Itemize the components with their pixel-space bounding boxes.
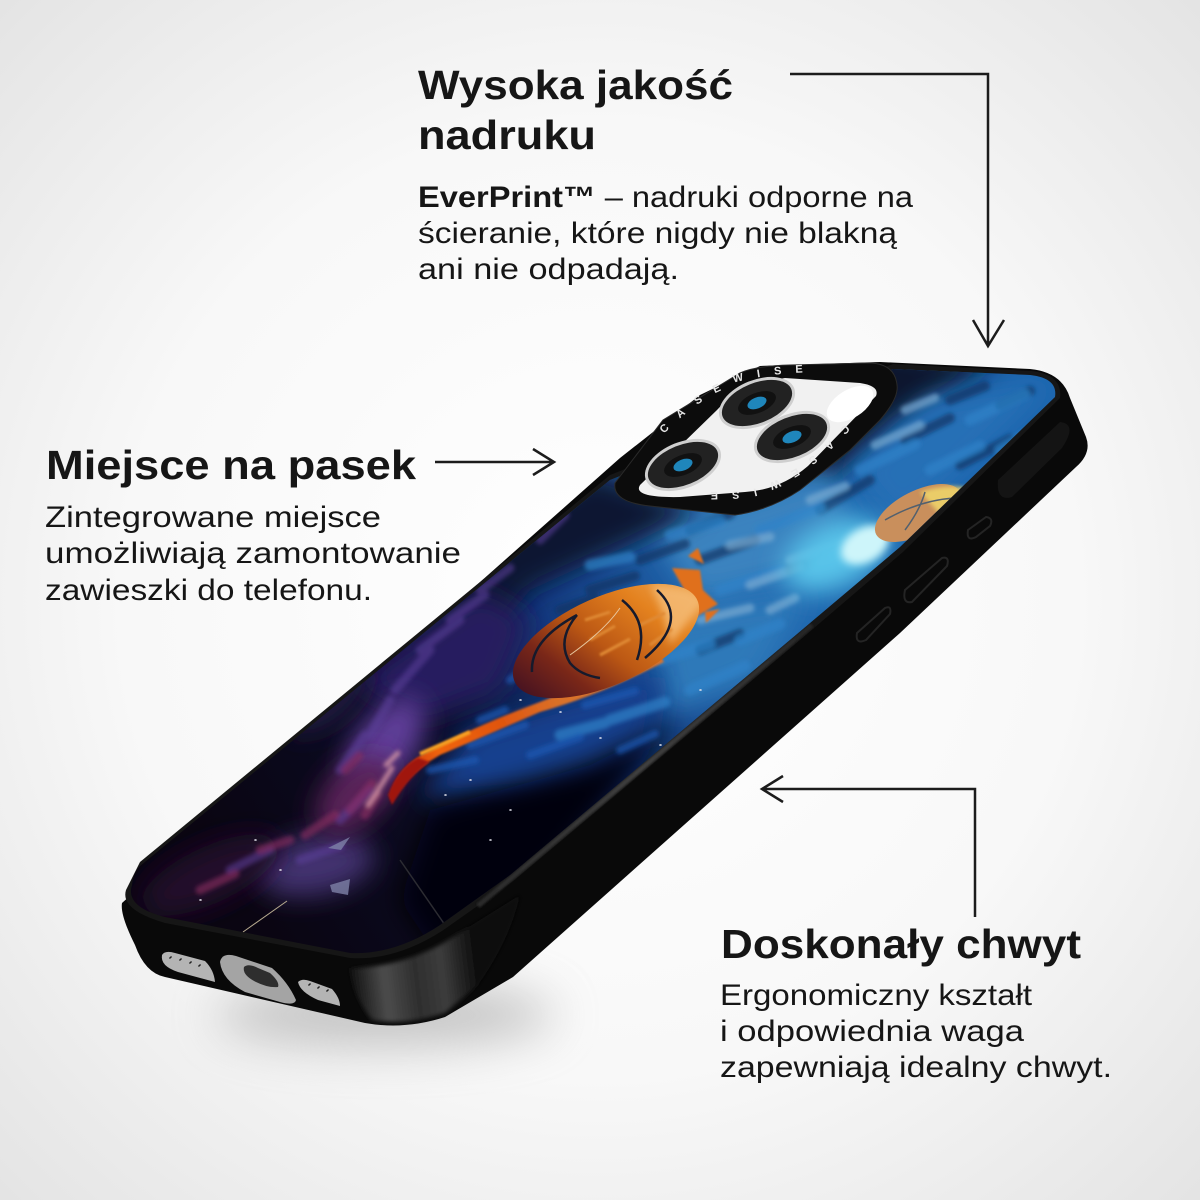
black lower right [400,720,680,960]
body text: ani nie odpadają. [418,253,679,286]
phone in case [122,362,1088,1026]
block: perfect grip [720,921,1112,1084]
case body [122,362,1088,1025]
body text: Zintegrowane miejsce [45,501,381,534]
lens left [637,429,729,501]
basketball [512,584,700,698]
body text: EverPrint™ – nadruki odporne na [418,181,914,214]
scratch line [243,901,287,932]
dark navy upper left [434,476,708,625]
painted artwork [131,369,1056,953]
glowing light [772,503,898,607]
flame trail [390,655,664,800]
heading: Miejsce na pasek [46,442,416,488]
heading: nadruku [418,112,596,158]
body text: i odpowiednia waga [720,1015,1025,1048]
lens right [746,401,838,473]
case rim [125,364,1060,958]
heading: Wysoka jakość [418,62,733,108]
brand lettering bottom: CASEWISE [711,426,849,500]
brand lettering top: CASEWISE [660,364,802,432]
arrow: print quality [790,74,1004,346]
block: strap slot [45,442,461,607]
side buttons [857,422,1070,641]
deep blue region [420,675,660,800]
body text: umożliwiają zamontowanie [45,537,461,570]
arrow: grip [762,776,975,917]
body text [45,501,461,607]
orange splash [671,547,720,624]
dark upper corner [808,369,1003,487]
heading: Doskonały chwyt [721,921,1081,967]
body text [418,181,914,286]
camera window [639,378,877,497]
block: print quality [418,62,914,286]
rim highlight [478,625,812,906]
specks [200,690,701,900]
body text: ścieranie, które nigdy nie blakną [418,217,898,250]
paint chips [328,837,350,895]
lens top [711,367,803,439]
body text: zawieszki do telefonu. [45,574,372,607]
body text [720,979,1112,1084]
light blue region [650,470,860,600]
bottom ports [162,952,340,1006]
heading [418,62,733,158]
small ball [874,484,959,542]
arrow: strap slot [435,449,554,475]
purple swirl [329,683,441,807]
soft brush strokes [200,386,1030,890]
phone shadow [215,983,555,1047]
body text: Ergonomiczny kształt [720,979,1032,1012]
camera island [614,362,898,516]
body text: zapewniają idealny chwyt. [720,1051,1112,1084]
case side highlight [350,895,520,1022]
